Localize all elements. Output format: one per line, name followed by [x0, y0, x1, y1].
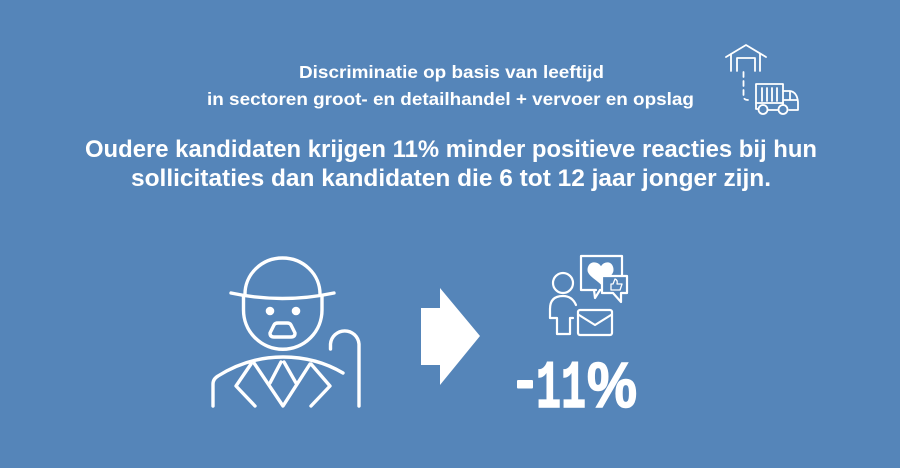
statistic: -11%: % [587, 349, 637, 421]
subtitle: Discriminatie op basis van leeftijd [299, 62, 604, 82]
heading [85, 136, 817, 192]
subtitle: in sectoren groot- en detailhandel + vervoer en opslag [207, 89, 694, 109]
arrow [421, 288, 480, 385]
heading: Oudere kandidaten krijgen 11% minder positieve reacties bij hun [85, 136, 817, 163]
statistic: -11% [517, 349, 637, 428]
icon: warehouse and truck [726, 45, 798, 114]
statistic: -11%: 1 [561, 351, 586, 428]
statistic: -11%: 1 [536, 351, 561, 428]
icon: person with reactions and envelope [550, 256, 627, 335]
subtitle [207, 62, 694, 109]
heading: sollicitaties dan kandidaten die 6 tot 12 jaar jonger zijn. [131, 165, 771, 192]
icon: elderly man with hat and cane [213, 258, 359, 406]
